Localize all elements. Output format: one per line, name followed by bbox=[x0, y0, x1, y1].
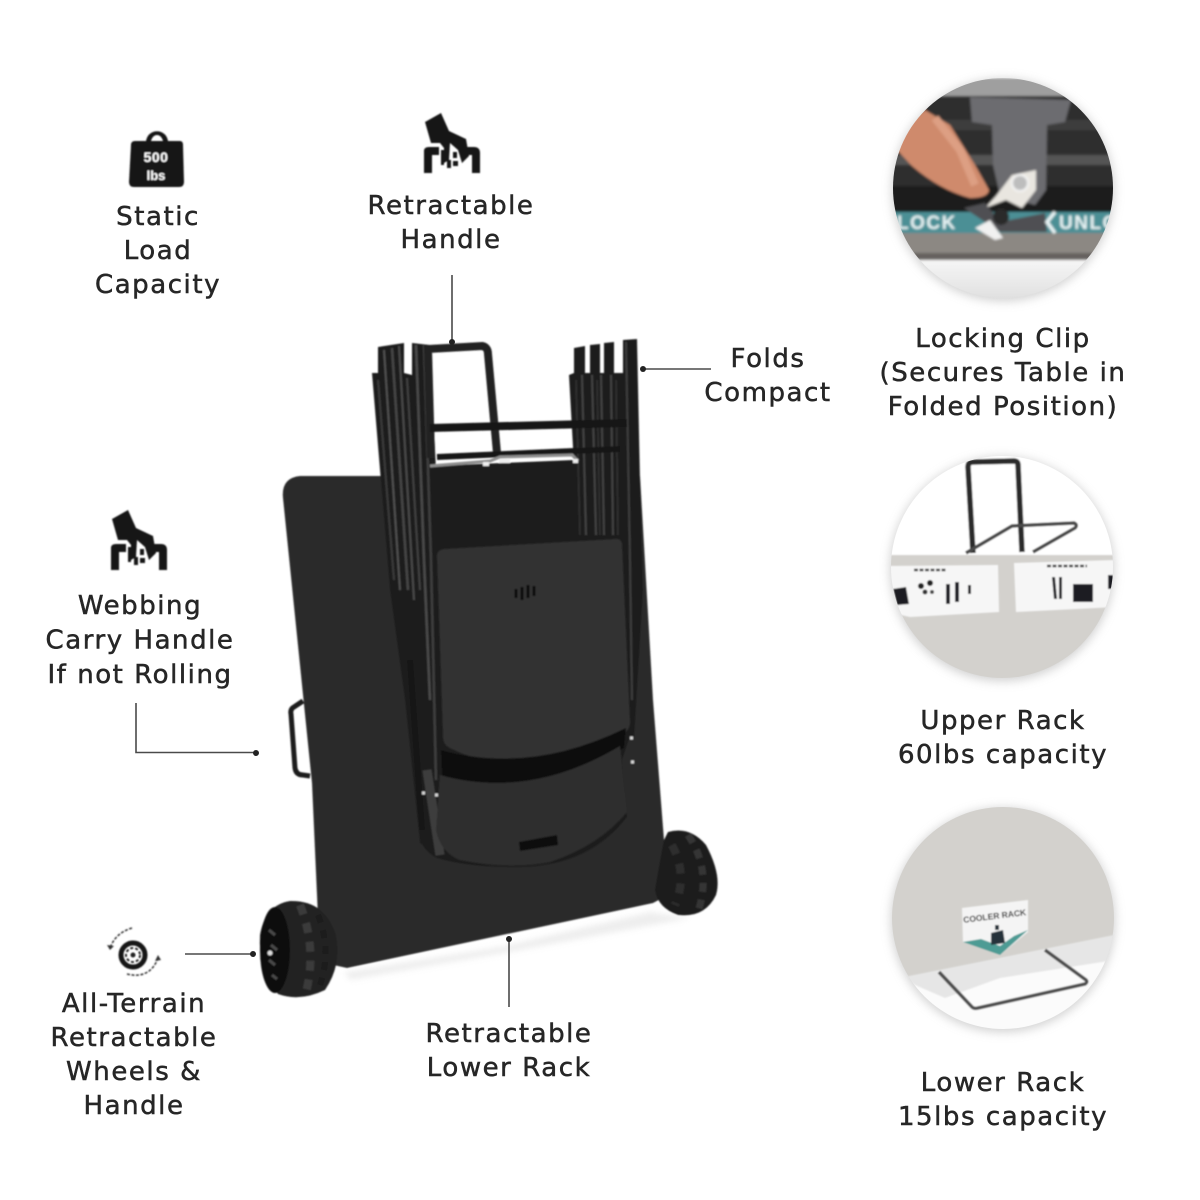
sticker text: COOLER RACK bbox=[963, 907, 1027, 925]
left wheel bbox=[260, 901, 338, 997]
panel: locking clip detail: UNLO bbox=[1059, 213, 1119, 234]
label: locking clip: Folded Position) bbox=[888, 392, 1118, 422]
panel: lower rack detail bbox=[885, 800, 1120, 1035]
label: static load capacity: Capacity bbox=[95, 270, 221, 300]
panel: upper rack detail bbox=[885, 450, 1120, 685]
connector: folds compact bbox=[640, 366, 711, 372]
unlock arrow text bbox=[1047, 212, 1055, 233]
icon: hand gripping handle bbox=[424, 113, 480, 173]
upper rack handle bbox=[968, 461, 1022, 553]
connector: retractable handle bbox=[449, 275, 455, 345]
chair body bbox=[420, 458, 632, 867]
cooler rack sticker bbox=[962, 900, 1028, 955]
connector: all-terrain wheels bbox=[185, 951, 256, 957]
icon: 500 lbs weight bag: 500 bbox=[144, 149, 168, 165]
label: upper rack: 60lbs capacity bbox=[898, 740, 1108, 770]
sticker bag icon bbox=[991, 925, 1005, 945]
label: folds compact: Compact bbox=[704, 378, 832, 408]
label: folds compact: Folds bbox=[731, 344, 805, 374]
label: retractable lower rack: Retractable bbox=[426, 1019, 592, 1049]
label: lower rack: 15lbs capacity bbox=[898, 1102, 1108, 1132]
connector: webbing carry handle bbox=[136, 703, 259, 756]
right wheel bbox=[655, 831, 718, 915]
label: all-terrain wheels: All-Terrain bbox=[62, 989, 206, 1019]
panel: locking clip detail bbox=[888, 74, 1118, 306]
chair seat bbox=[436, 746, 627, 866]
clip latch bbox=[985, 170, 1036, 208]
label: webbing carry handle: Webbing bbox=[78, 591, 202, 621]
sticker teal chevron bbox=[963, 930, 1028, 955]
metal clip plate bbox=[970, 97, 1071, 205]
folded table bbox=[283, 476, 668, 968]
product photo: folded table with chair on cart bbox=[260, 339, 718, 997]
retractable handle bbox=[428, 346, 497, 458]
label: all-terrain wheels: Wheels & bbox=[66, 1057, 202, 1087]
teal lock strip bbox=[880, 212, 1130, 233]
label: retractable lower rack: Lower Rack bbox=[427, 1053, 591, 1083]
webbing carry handle bbox=[291, 701, 310, 776]
icon: rotating wheel bbox=[107, 928, 161, 975]
ground shadow bbox=[345, 912, 690, 980]
lock text: LOCK bbox=[897, 213, 957, 234]
silver rack bar bbox=[430, 455, 578, 466]
right instruction sticker bbox=[1014, 560, 1116, 612]
chair left legs bundle bbox=[372, 343, 443, 858]
lower rack frame bbox=[939, 950, 1087, 1008]
icon: 500 lbs weight bag bbox=[129, 131, 184, 187]
label: all-terrain wheels: Retractable bbox=[51, 1023, 217, 1053]
seat slot bbox=[519, 835, 558, 851]
chair rivets bbox=[422, 738, 634, 795]
label: locking clip: Locking Clip bbox=[915, 324, 1091, 354]
backrest vent bbox=[516, 585, 534, 600]
label: upper rack: Upper Rack bbox=[920, 706, 1086, 736]
cross bars bbox=[430, 423, 627, 428]
upper rack frame bbox=[966, 523, 1076, 553]
connector: retractable lower rack bbox=[506, 936, 512, 1007]
icon: hand gripping webbing handle bbox=[111, 510, 167, 570]
label: webbing carry handle: Carry Handle bbox=[46, 626, 234, 656]
label: locking clip: (Secures Table in bbox=[880, 358, 1126, 388]
label: webbing carry handle: If not Rolling bbox=[47, 660, 233, 690]
chair seat gap bbox=[441, 728, 626, 784]
icon: 500 lbs weight bag: lbs bbox=[147, 168, 165, 183]
label: static load capacity: Load bbox=[124, 236, 192, 266]
left instruction sticker bbox=[888, 565, 999, 617]
label: retractable handle: Retractable bbox=[368, 191, 534, 221]
chair right legs bundle bbox=[569, 339, 643, 740]
label: static load capacity: Static bbox=[116, 202, 200, 232]
sticker pictograms bbox=[893, 575, 1114, 605]
chair backrest panel bbox=[437, 539, 630, 763]
white table edge bbox=[913, 961, 1105, 1029]
label: all-terrain wheels: Handle bbox=[84, 1091, 184, 1121]
label: lower rack: Lower Rack bbox=[921, 1068, 1085, 1098]
label: retractable handle: Handle bbox=[400, 225, 502, 255]
infographic canvas bbox=[46, 74, 1123, 1131]
finger bbox=[897, 110, 989, 198]
